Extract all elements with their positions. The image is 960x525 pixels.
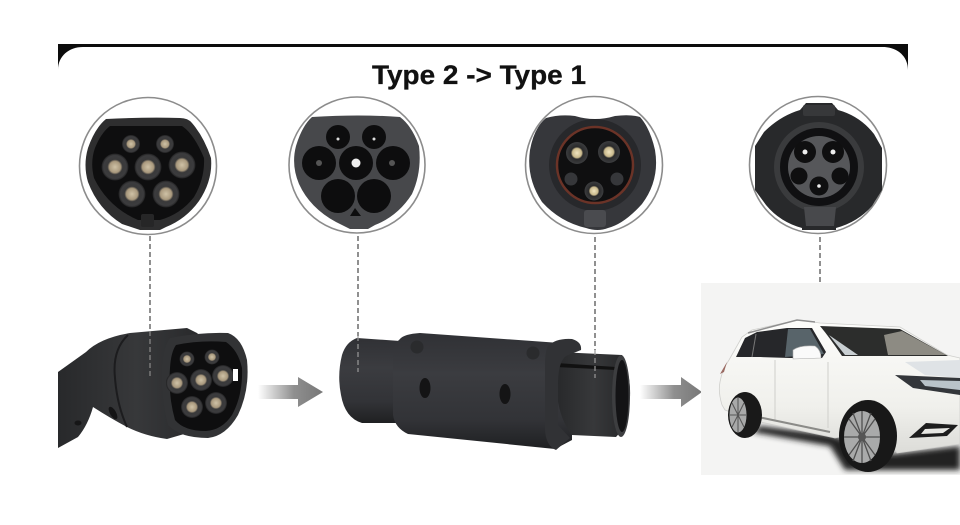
panel: Type 1 plug face circle <box>526 96 662 234</box>
pins <box>564 141 624 200</box>
hood shading <box>905 360 960 378</box>
photo: white plug-in SUV <box>701 283 960 475</box>
dashed leader: first connector <box>149 236 151 331</box>
arrow: adapter to car <box>640 377 702 407</box>
dashed leader: fourth connector <box>819 237 821 282</box>
windshield <box>820 326 948 356</box>
dashed leader: second connector <box>357 236 359 336</box>
dashed overlays on adapter <box>358 336 595 378</box>
photo background <box>701 283 960 475</box>
car body <box>719 320 960 453</box>
rear lamp <box>720 362 727 374</box>
socket holes <box>790 141 848 196</box>
top frame <box>58 44 908 70</box>
rear wheel <box>728 392 762 438</box>
adapter body <box>393 333 572 449</box>
panel: Type 2 inlet face circle <box>289 97 425 233</box>
ground shadow <box>752 426 960 470</box>
pins <box>102 135 196 208</box>
socket holes <box>302 125 410 216</box>
plug face <box>162 333 248 438</box>
adapter collar <box>545 339 581 450</box>
mirror <box>793 346 821 359</box>
adapter plug end <box>557 352 630 437</box>
side windows <box>736 328 826 358</box>
photo: Type 2 to Type 1 adapter <box>339 333 630 450</box>
plug pins <box>166 350 234 418</box>
title: Type 2 -> Type 1 <box>372 60 586 90</box>
adapter screws and holes <box>410 340 540 404</box>
sill trim <box>758 417 830 432</box>
fog lamp <box>909 423 958 438</box>
door lines <box>775 360 828 428</box>
roof rail <box>748 320 815 333</box>
photo: Type 2 charging plug <box>58 328 248 448</box>
adapter left cap <box>339 338 400 423</box>
front wheel <box>839 400 897 472</box>
adapter plug opening <box>612 355 630 437</box>
arrow: plug to adapter <box>258 377 323 407</box>
panel: Type 1 inlet face circle <box>750 96 886 234</box>
headlight <box>895 375 960 395</box>
panel: Type 2 plug face circle <box>80 98 216 234</box>
dashed overlay on plug <box>149 331 151 376</box>
dashed leader: third connector <box>594 237 596 350</box>
